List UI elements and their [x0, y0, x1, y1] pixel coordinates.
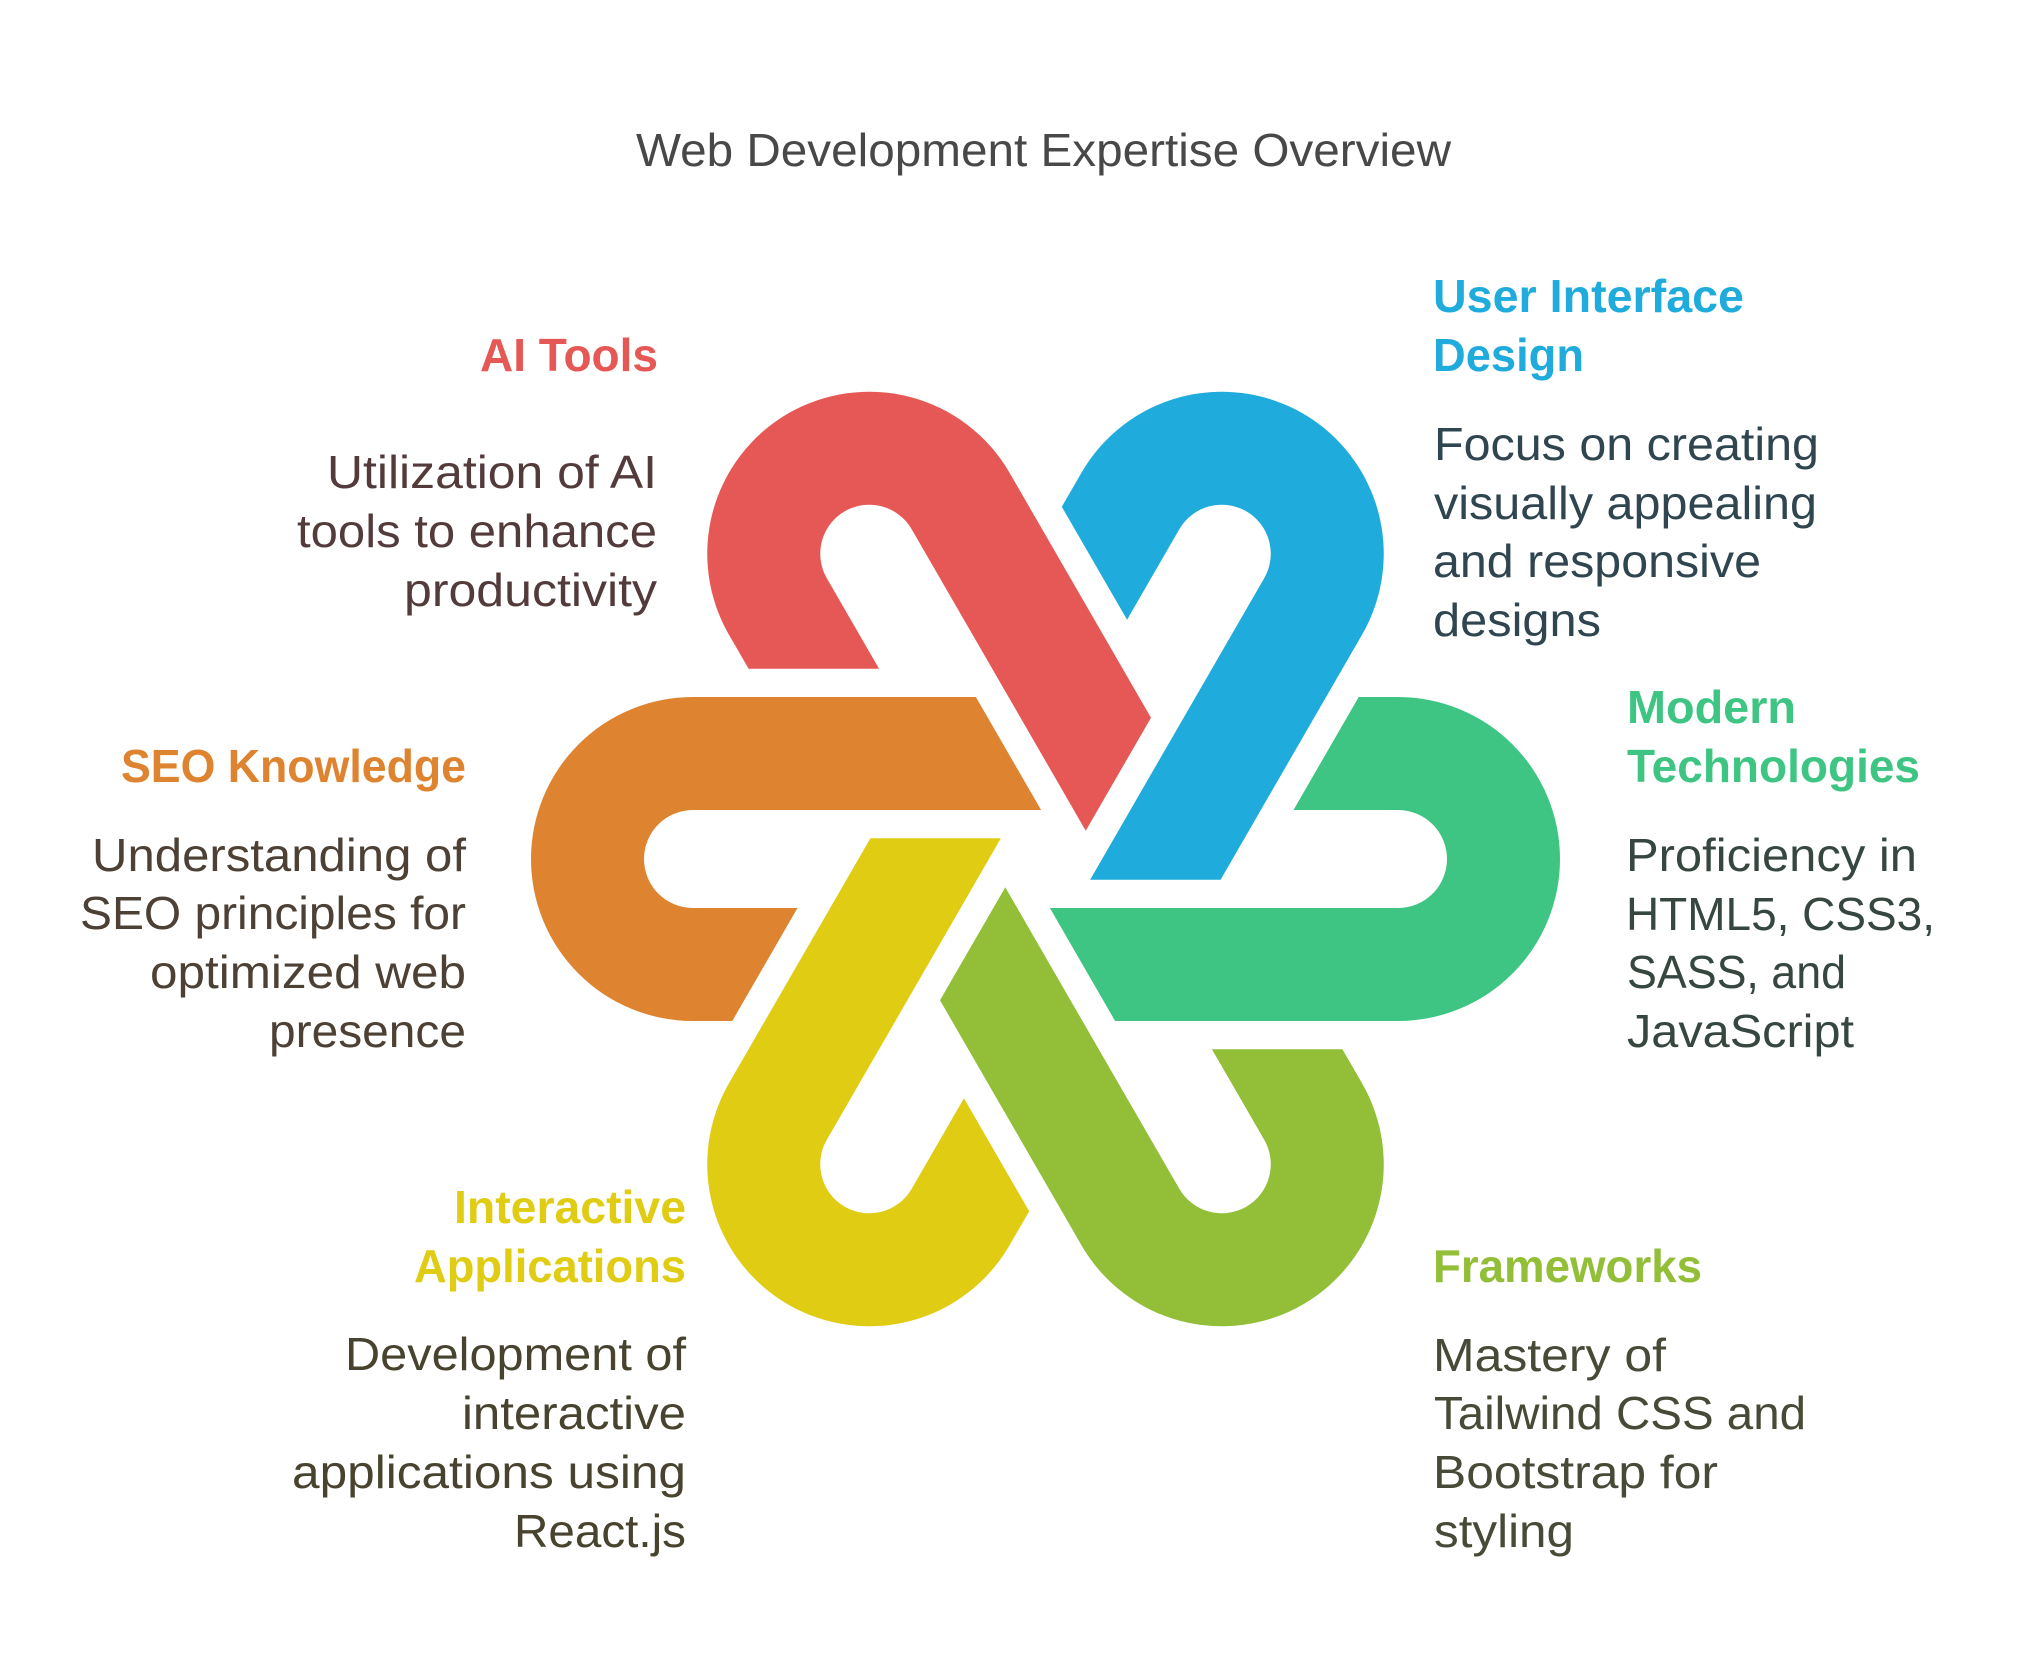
description: AI Tools: tools to enhance	[297, 505, 657, 557]
description: SEO Knowledge: optimized web	[150, 946, 466, 998]
heading: SEO Knowledge: SEO Knowledge	[121, 740, 466, 792]
description: Frameworks: Mastery of	[1433, 1329, 1666, 1381]
link: Interactive Applications (yellow)	[648, 782, 1184, 1386]
heading: User Interface Design: Design	[1433, 329, 1584, 381]
description: AI Tools: productivity	[404, 564, 657, 616]
title: Web Development Expertise Overview	[636, 124, 1452, 176]
heading: Modern Technologies: Technologies	[1627, 740, 1920, 792]
heading: Modern Technologies	[1627, 681, 1920, 792]
heading: Interactive Applications: Applications	[414, 1240, 686, 1292]
description: Modern Technologies	[1626, 829, 1935, 1057]
diagram: interlocking six-link ring	[531, 332, 1560, 1386]
panel: AI Tools	[297, 329, 658, 616]
link: AI Tools (red)	[648, 332, 1184, 936]
panel: Modern Technologies	[1626, 681, 1935, 1057]
link: User Interface Design (blue)	[907, 332, 1443, 936]
description: AI Tools	[297, 446, 657, 616]
description: User Interface Design: visually appealing	[1434, 477, 1817, 529]
description: SEO Knowledge: SEO principles for	[80, 887, 466, 939]
description: User Interface Design: designs	[1433, 594, 1601, 646]
description: Modern Technologies: JavaScript	[1627, 1005, 1854, 1057]
description: Modern Technologies: SASS, and	[1627, 946, 1846, 998]
panel: Interactive Applications	[292, 1181, 686, 1557]
description: AI Tools: Utilization of AI	[327, 446, 657, 498]
link: Frameworks (olive green)	[907, 782, 1443, 1386]
description: Interactive Applications	[292, 1328, 686, 1557]
link: Modern Technologies (green)	[1050, 697, 1560, 1021]
description: Frameworks: styling	[1434, 1505, 1574, 1557]
heading: User Interface Design: User Interface	[1433, 270, 1744, 322]
heading: Modern Technologies: Modern	[1627, 681, 1796, 733]
description: Interactive Applications: interactive	[462, 1387, 686, 1439]
description: SEO Knowledge	[80, 829, 466, 1057]
description: Modern Technologies: Proficiency in	[1626, 829, 1917, 881]
heading: AI Tools: AI Tools	[480, 329, 658, 381]
description: User Interface Design: Focus on creating	[1434, 418, 1819, 470]
heading: Frameworks: Frameworks	[1433, 1240, 1702, 1292]
description: Modern Technologies: HTML5, CSS3,	[1626, 888, 1935, 940]
description: Frameworks: Bootstrap for	[1433, 1446, 1718, 1498]
description: User Interface Design: and responsive	[1433, 535, 1761, 587]
description: Interactive Applications: Development of	[345, 1328, 686, 1380]
description: Frameworks: Tailwind CSS and	[1434, 1387, 1806, 1439]
panel: SEO Knowledge	[80, 740, 466, 1057]
description: SEO Knowledge: presence	[269, 1005, 466, 1057]
panel: User Interface Design	[1433, 270, 1819, 646]
link: SEO Knowledge (orange)	[531, 697, 1041, 1021]
description: Frameworks	[1433, 1329, 1806, 1557]
description: SEO Knowledge: Understanding of	[92, 829, 466, 881]
description: Interactive Applications: React.js	[514, 1505, 686, 1557]
description: Interactive Applications: applications using	[292, 1446, 686, 1498]
heading: Interactive Applications: Interactive	[454, 1181, 686, 1233]
heading: Interactive Applications	[414, 1181, 686, 1292]
description: User Interface Design	[1433, 418, 1819, 646]
panel: Frameworks	[1433, 1240, 1806, 1557]
heading: User Interface Design	[1433, 270, 1744, 381]
